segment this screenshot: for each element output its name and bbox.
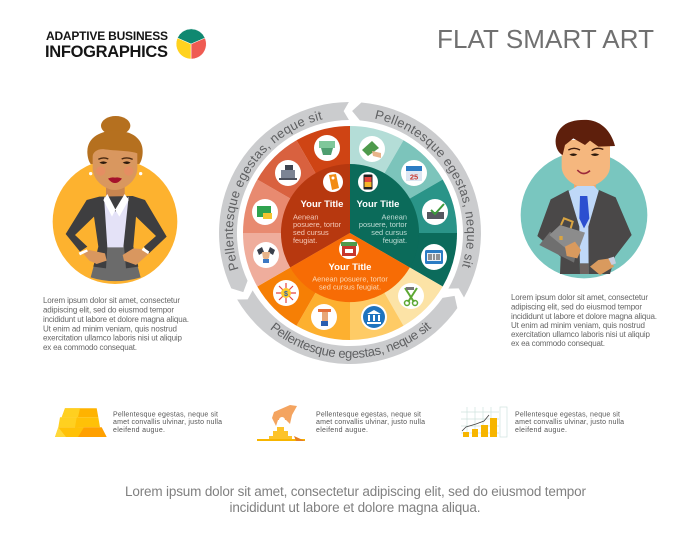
icon: hand and coins <box>257 405 305 441</box>
ring labels: Pellentesque egestas, neque sit <box>224 112 323 271</box>
bottom text <box>125 484 586 515</box>
jacket <box>537 190 632 274</box>
icon: scissors <box>398 283 424 309</box>
caption: gold bars <box>113 412 222 434</box>
man illustration <box>521 120 647 278</box>
face <box>93 149 137 190</box>
left paragraph: ex ea commodo consequat. <box>43 343 137 352</box>
main title: FLAT SMART ART <box>437 24 654 54</box>
logo <box>45 29 206 61</box>
ring labels: Pellentesque egestas, neque sit <box>270 322 432 361</box>
neck <box>106 180 125 210</box>
caption: growth chart <box>515 412 624 434</box>
face <box>562 140 610 187</box>
icon: calendar <box>401 160 427 186</box>
skirt <box>91 247 141 281</box>
inner text: red: Your Title <box>301 199 343 210</box>
icon: signature check <box>422 199 448 225</box>
caption: hand and coins: eleifend augue. <box>316 427 368 434</box>
right paragraph <box>511 293 657 348</box>
bottom text: Lorem ipsum dolor sit amet, consectetur adipiscing elit, sed do eiusmod tempor <box>125 484 586 499</box>
inner text: red: feugiat. <box>293 236 317 245</box>
icon: barcode card <box>421 244 447 270</box>
right paragraph: Ut enim ad minim veniam, quis nostrud <box>511 321 645 330</box>
orange background circle <box>53 159 177 284</box>
icon: dollar burst: $ <box>284 291 288 298</box>
inner text: teal: sed cursus <box>371 228 407 237</box>
logo pie icon <box>176 29 206 59</box>
left paragraph: incididunt ut labore et dolore magna aliqua. <box>43 315 189 324</box>
belt <box>580 263 589 274</box>
icon: cash machine <box>314 135 340 161</box>
icon: phone <box>358 172 378 192</box>
facial features <box>89 158 142 183</box>
inner text: orange <box>312 262 388 292</box>
hair <box>556 120 615 155</box>
inner sector: red <box>281 164 350 268</box>
icon: growth chart <box>461 407 507 437</box>
inner text: orange: sed cursus feugiat. <box>319 282 381 292</box>
ring labels: Pellentesque egestas, neque sit <box>375 110 474 268</box>
blazer <box>66 196 167 268</box>
icon: handshake <box>253 242 279 268</box>
caption: gold bars: Pellentesque egestas, neque sit <box>113 412 218 418</box>
teal background circle <box>521 152 647 278</box>
right paragraph: exercitation ullamco laboris nisi ut aliquip <box>511 330 651 339</box>
icon: money in hand <box>359 136 385 162</box>
watch <box>608 257 616 265</box>
icon: calendar: 25 <box>410 172 418 182</box>
caption: hand and coins: Pellentesque egestas, neque sit <box>316 412 421 418</box>
left paragraph: Lorem ipsum dolor sit amet, consectetur <box>43 296 180 305</box>
left paragraph <box>43 296 189 352</box>
hair <box>87 116 143 164</box>
logo text: INFOGRAPHICS <box>45 43 168 61</box>
right paragraph: Lorem ipsum dolor sit amet, consectetur <box>511 293 648 302</box>
icon: cash register <box>275 160 301 186</box>
gray arrow ring <box>171 87 481 412</box>
icon: store <box>339 239 359 259</box>
hands <box>565 242 614 275</box>
ring labels <box>224 110 474 361</box>
inner text: orange: Your Title <box>329 262 371 273</box>
facial features <box>568 148 603 174</box>
outer segments <box>243 126 457 340</box>
inner sector: teal <box>350 164 419 268</box>
inner text: teal <box>357 199 408 245</box>
logo text <box>45 29 168 61</box>
caption: gold bars: eleifend augue. <box>113 427 165 434</box>
circular diagram <box>219 102 481 364</box>
left paragraph: Ut enim ad minim veniam, quis nostrud <box>43 324 177 334</box>
caption: hand and coins: amet convallis ulvinar, justo nulla <box>316 419 425 426</box>
left paragraph: adipiscing elit, sed do eiusmod tempor <box>43 306 174 314</box>
icon: bank <box>361 304 387 330</box>
hands <box>82 248 149 265</box>
shirt <box>104 197 129 247</box>
icon: door hanger <box>323 172 343 192</box>
inner text: teal: posuere, tortor <box>359 220 408 229</box>
caption: growth chart: amet convallis ulvinar, justo nulla <box>515 419 624 426</box>
icon: gold bars <box>55 408 107 437</box>
right paragraph: ex ea commodo consequat. <box>511 339 605 348</box>
logo text: ADAPTIVE BUSINESS <box>46 29 168 43</box>
inner text: red: sed cursus <box>293 228 329 237</box>
inner text: teal: Aenean <box>382 212 407 222</box>
inner text: red <box>293 199 343 245</box>
right paragraph: incididunt ut labore et dolore magna aliqua. <box>511 312 657 321</box>
caption: growth chart: Pellentesque egestas, neque sit <box>515 412 620 418</box>
briefcase <box>539 218 585 263</box>
icon: dollar burst <box>273 280 299 306</box>
collar <box>103 194 129 217</box>
inner sector: orange <box>290 233 410 302</box>
caption: hand and coins <box>316 412 425 434</box>
shirt <box>568 186 599 263</box>
inner text: red: Aenean <box>293 212 318 222</box>
tie <box>579 196 589 228</box>
left paragraph: exercitation ullamco laboris nisi ut aliquip <box>43 334 183 342</box>
inner text: orange: Aenean posuere, tortor <box>312 274 388 284</box>
caption: growth chart: eleifend augue. <box>515 427 567 434</box>
woman illustration <box>53 116 177 284</box>
inner text: red: posuere, tortor <box>293 220 342 229</box>
icon: hand holding T <box>311 304 337 330</box>
right paragraph: adipiscing elit, sed do eiusmod tempor <box>511 302 642 312</box>
icon: banknotes <box>252 199 278 225</box>
bottom text: incididunt ut labore et dolore magna aliqua. <box>230 500 480 515</box>
inner text: teal: feugiat. <box>383 236 407 245</box>
cuffs <box>79 247 149 255</box>
inner text: teal: Your Title <box>357 199 399 210</box>
caption: gold bars: amet convallis ulvinar, justo nulla <box>113 419 222 426</box>
neck <box>574 178 596 200</box>
